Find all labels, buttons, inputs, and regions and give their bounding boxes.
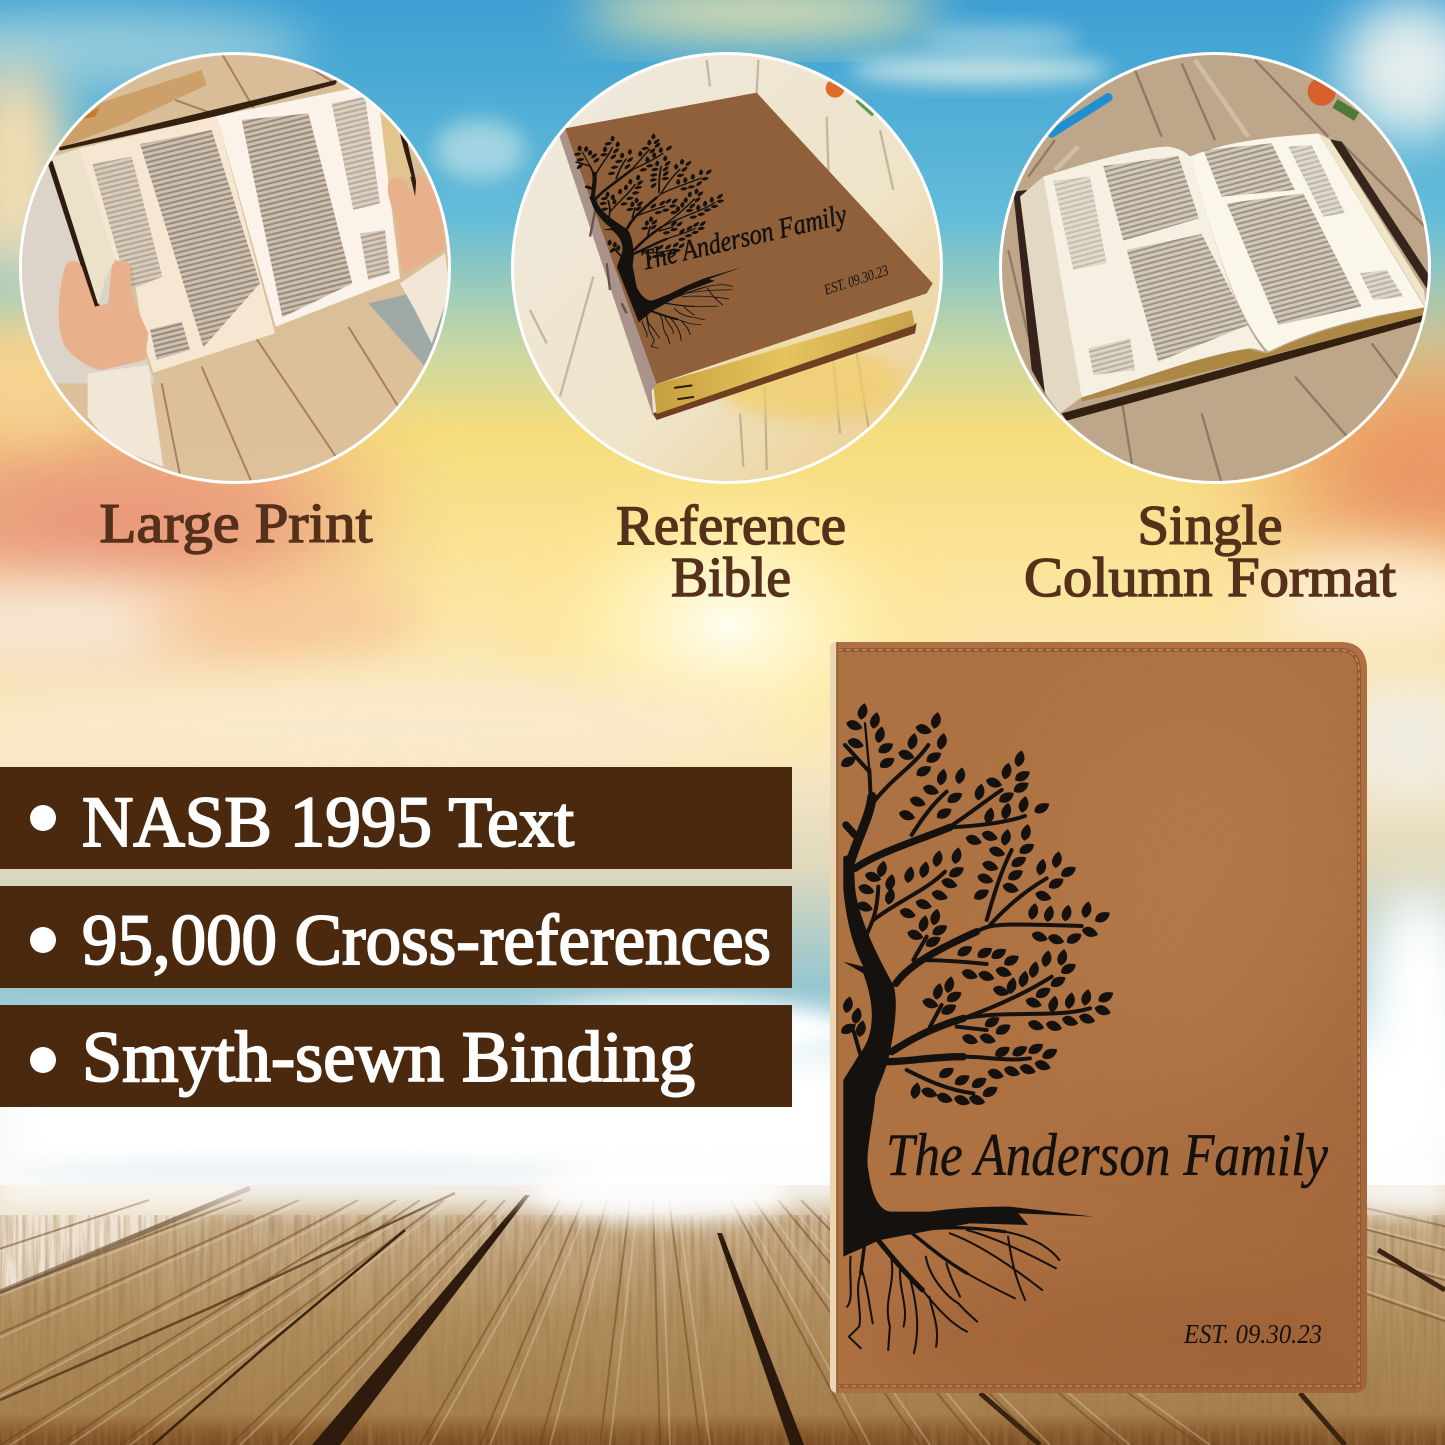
family name: The Anderson Family — [886, 1122, 1328, 1188]
photo circle: single column format — [995, 50, 1435, 490]
label: single column format: Single — [1138, 495, 1282, 557]
open bible — [1013, 133, 1430, 421]
orange flower — [1308, 78, 1357, 117]
feature bar: NASB 1995 Text: NASB 1995 Text — [82, 782, 574, 862]
blue pen — [1052, 97, 1108, 133]
bible text columns — [1053, 143, 1403, 375]
feature bar: 95,000 Cross-references: 95,000 Cross-references — [82, 900, 771, 980]
cover date: EST. 09.30.23 — [821, 262, 891, 299]
label: reference bible: Reference — [616, 495, 846, 557]
background: wooden table — [0, 1165, 1445, 1445]
angled bible — [559, 93, 933, 420]
label: large print: Large Print — [100, 493, 373, 555]
cover tree — [569, 103, 768, 353]
knit sleeves — [88, 253, 450, 467]
label: single column format — [1024, 495, 1396, 609]
established date: EST. 09.30.23 — [1183, 1319, 1322, 1349]
tree illustration — [840, 702, 1115, 1353]
label: reference bible: Bible — [671, 547, 791, 609]
label: reference bible — [616, 495, 846, 609]
feature bar: Smyth-sewn Binding — [0, 1005, 792, 1107]
feature bar: Smyth-sewn Binding: Smyth-sewn Binding — [82, 1017, 695, 1097]
leather bible cover — [830, 642, 1367, 1400]
cover name: The Anderson Family — [638, 198, 850, 277]
bible text columns — [92, 97, 390, 360]
open bible — [48, 79, 420, 373]
feature bar: NASB 1995 Text — [0, 767, 792, 869]
hands holding bible — [59, 173, 445, 370]
label: single column format: Column Format — [1024, 547, 1396, 609]
photo circle: large print — [15, 50, 455, 490]
feature bar: 95,000 Cross-references — [0, 886, 792, 988]
photo circle: reference bible — [510, 50, 945, 485]
